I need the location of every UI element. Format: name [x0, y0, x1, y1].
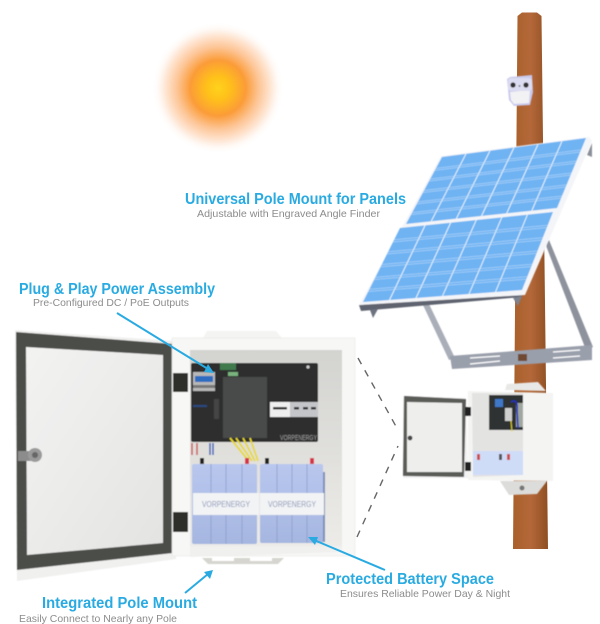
arrow: plug and play — [117, 313, 214, 373]
battery left — [192, 458, 259, 544]
upper panel — [406, 138, 586, 224]
breaker — [193, 372, 215, 391]
heading: integrated pole mount: Integrated Pole Mount — [42, 595, 198, 612]
heading: universal pole mount: Universal Pole Mount for Panels — [185, 191, 406, 208]
wooden pole — [513, 12, 548, 549]
hinges — [173, 373, 188, 532]
din rail — [270, 402, 318, 417]
small enclosure on pole — [403, 382, 553, 495]
heading: protected battery space: Protected Battery Space — [326, 571, 494, 588]
large open enclosure — [15, 330, 355, 581]
icon: camera on pole — [507, 75, 533, 106]
battery left: VORPENERGY — [202, 500, 251, 509]
subtext: plug and play: Pre-Configured DC / PoE Outputs — [33, 297, 189, 309]
network switch — [223, 377, 267, 438]
battery right — [260, 458, 325, 543]
lower panel — [363, 212, 553, 302]
power assembly board — [191, 363, 318, 442]
subtext: protected battery space: Ensures Reliable Power Day & Night — [340, 588, 510, 600]
pole mount struts and bracket — [423, 240, 593, 369]
door lock — [18, 448, 42, 462]
battery right: VORPENERGY — [268, 500, 317, 509]
output cables — [192, 443, 213, 455]
icon: sun — [152, 22, 284, 154]
arrow: pole mount — [185, 570, 213, 593]
arrow: battery — [308, 537, 385, 570]
door — [15, 330, 176, 581]
heading: plug and play: Plug & Play Power Assembly — [19, 281, 215, 298]
yellow cables — [230, 438, 258, 461]
dashed zoom connector lines — [357, 358, 398, 537]
subtext: universal pole mount: Adjustable with Engraved Angle Finder — [197, 208, 380, 220]
enclosure body — [172, 331, 355, 564]
solar panel array — [359, 137, 592, 318]
board logo: VORPENERGY — [280, 435, 317, 442]
